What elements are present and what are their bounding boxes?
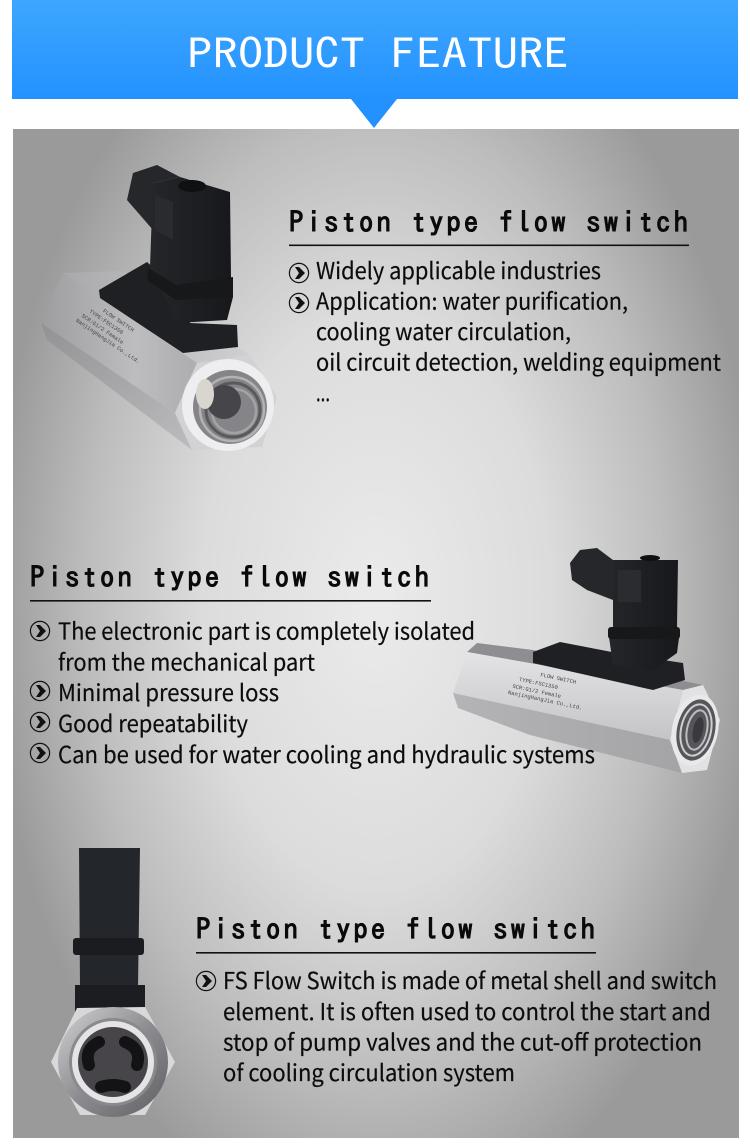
product photo: flow switch front view bbox=[51, 848, 175, 1117]
section 2: heading: Piston type flow switch bbox=[30, 562, 429, 592]
section 2: bullet list: Good repeatability bbox=[58, 705, 248, 739]
header banner bbox=[12, 0, 738, 128]
section 2: bullet list: from the mechanical part bbox=[58, 644, 315, 678]
icon: bullet arrow bbox=[289, 263, 309, 283]
section 2: bullet list: Minimal pressure loss bbox=[58, 674, 279, 708]
product photo: flow switch side view: FLOW SWITCH bbox=[540, 671, 577, 686]
product photo: flow switch angled view: FLOW SWITCH bbox=[101, 308, 135, 334]
product photo: flow switch side view: NanjingHangJia Co.,Ltd. bbox=[507, 689, 583, 712]
section 3: text block: of cooling circulation system bbox=[223, 1054, 515, 1088]
section 1: bullet list: oil circuit detection, welding equipment bbox=[316, 344, 721, 378]
product photo: flow switch side view: TYPE:FSC1350 bbox=[518, 676, 559, 691]
section 1: bullet list: ... bbox=[316, 374, 330, 408]
icon: bullet arrow bbox=[289, 293, 309, 313]
product photo: flow switch side view: SCR:G1/2 Female bbox=[512, 683, 562, 700]
section 1: bullet list: cooling water circulation, bbox=[316, 313, 571, 347]
icon: bullet arrow bbox=[196, 971, 216, 991]
section 3: text block bbox=[196, 962, 717, 1088]
icon: bullet arrow bbox=[30, 621, 50, 641]
section 2: bullet list: The electronic part is completely isolated bbox=[58, 612, 475, 646]
product photo: flow switch angled view: SCR:G1/2 Female bbox=[80, 312, 125, 346]
section 2: bullet list: Can be used for water cooling and hydraulic systems bbox=[58, 736, 595, 770]
product photo: flow switch angled view: TYPE:FSC1350 bbox=[88, 308, 125, 336]
section 1: heading: Piston type flow switch bbox=[289, 208, 688, 236]
icon: bullet arrow bbox=[30, 681, 50, 701]
section 1: bullet list: Widely applicable industries bbox=[316, 252, 601, 286]
product photo: flow switch angled view: NanjingHangJia Co.,Ltd. bbox=[74, 317, 141, 365]
product photo: flow switch side view bbox=[453, 548, 725, 773]
section 1: bullet list bbox=[289, 252, 721, 408]
icon: bullet arrow bbox=[30, 743, 50, 763]
flow slots bbox=[88, 1042, 138, 1087]
icon: bullet arrow bbox=[30, 712, 50, 732]
product photo: flow switch angled view bbox=[41, 165, 277, 451]
section 3: text block: FS Flow Switch is made of metal shell and switch bbox=[223, 962, 717, 996]
section 2: bullet list bbox=[30, 612, 595, 770]
section 3: text block: stop of pump valves and the cut-off protection bbox=[223, 1024, 702, 1058]
section 1: bullet list: Application: water purification, bbox=[316, 282, 628, 316]
section 3: text block: element. It is often used to control the start and bbox=[223, 993, 711, 1027]
section 3: heading: Piston type flow switch bbox=[196, 914, 595, 944]
title: PRODUCT FEATURE bbox=[187, 33, 569, 75]
